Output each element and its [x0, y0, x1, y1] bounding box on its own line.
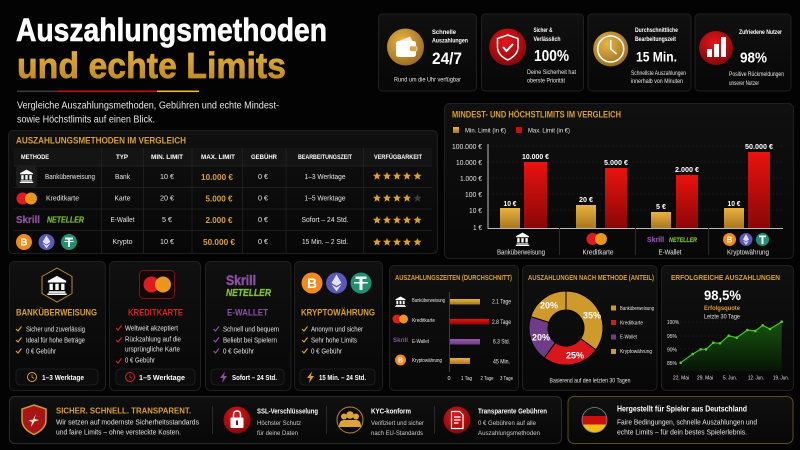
icon: clock [593, 32, 628, 66]
table row: Krypto [16, 234, 348, 250]
donut legend: Kryptowährung [620, 349, 652, 355]
donut legend: Banküberweisung [620, 306, 654, 312]
y axis: 10.000 € [456, 158, 483, 167]
bars: E-Wallet: 2.000 € [675, 165, 700, 174]
donut labels: 35% [583, 310, 601, 320]
bars: Kryptowährung [724, 142, 774, 228]
row: Banküberweisung: Banküberweisung [412, 298, 445, 304]
table row: E-Wallet: Skrill [16, 215, 40, 226]
item: fees: Auszahlungsmethoden [478, 430, 540, 437]
row: Kryptowährung: B [398, 358, 403, 364]
table row: Kreditkarte: 20 € [160, 196, 174, 202]
x axis: E-Wallet [658, 250, 682, 256]
row: Banküberweisung: 2.1 Tage [492, 298, 511, 306]
panel: KPI security: oberste Priorität [527, 78, 565, 84]
x axis: NETELLER [669, 237, 697, 244]
x axis: Kreditkarte [582, 250, 614, 256]
panel: KPI satisfaction: 98% [740, 50, 767, 66]
panel: Banküberweisung card: BANKÜBERWEISUNG [16, 308, 97, 318]
panel: KPI satisfaction: Zufriedene Nutzer [739, 30, 783, 36]
heading: table title: AUSZAHLUNGSMETHODEN IM VERGLEICH [16, 136, 186, 146]
legend: Max. Limit (in €) [528, 128, 570, 134]
pill: processing time: 15 Min. – 24 Std. [319, 373, 366, 382]
line chart: 19. Jun. [773, 376, 789, 382]
y axis: 1 € [473, 223, 483, 232]
bars: Kreditkarte: 5.000 € [604, 158, 629, 167]
donut footnote: Basierend auf den letzten 30 Tagen [550, 378, 630, 384]
table row: Banküberweisung: 10.000 € [201, 172, 233, 182]
bars: Banküberweisung: 10.000 € [522, 152, 550, 161]
panel: comparison table [8, 130, 438, 254]
icon: wallet [387, 28, 424, 66]
y axis: 100.000 € [452, 142, 483, 151]
table row: Kreditkarte: Kreditkarte [46, 196, 79, 202]
line chart: 12. Jun. [748, 376, 764, 382]
row: Banküberweisung [395, 296, 511, 307]
panel: KPI processing time: Schnellste Auszahlungen [631, 71, 686, 77]
item: KYC [337, 407, 425, 437]
item: SSL: Höchster Schutz [257, 420, 301, 427]
table row: Krypto: 50.000 € [203, 237, 235, 247]
icon: shield [489, 28, 526, 66]
panel: Kryptowährung card: 0 € Gebühr [311, 348, 343, 356]
panel: E-Wallet card: E-WALLET [227, 308, 268, 318]
table row: Banküberweisung: 0 € [258, 174, 268, 181]
panel: KPI processing time: 15 Min. [636, 48, 677, 64]
table header row: BEARBEITUNGSZEIT [298, 155, 352, 161]
table row: E-Wallet: 5 € [162, 217, 172, 224]
table header row: MAX. LIMIT [201, 154, 235, 161]
panel: KPI satisfaction: unserer Nutzer [729, 81, 759, 87]
line chart: 29. Mai [697, 376, 713, 382]
x axis labels: 1 Tag [461, 376, 472, 382]
x axis labels: 0 [447, 376, 451, 382]
icon: bank hexagon [42, 268, 72, 302]
item: fees [444, 406, 547, 437]
table row: Banküberweisung [16, 166, 346, 187]
panel: KPI processing time: Bearbeitungszeit [635, 37, 676, 43]
x axis labels: 2 Tage [480, 376, 494, 382]
x axis: Banküberweisung [497, 250, 545, 256]
panel: KPI processing time: innerhalb von Minuten [631, 79, 683, 85]
panel: Kryptowährung card: Sehr hohe Limits [311, 338, 357, 344]
bars: Kryptowährung: 10 € [728, 199, 741, 208]
donut labels: 25% [566, 350, 584, 360]
heading: success: ERFOLGREICHE AUSZAHLUNGEN [671, 273, 780, 282]
x axis: Skrill [647, 235, 664, 244]
panel: KPI fast payouts: Schnelle [432, 30, 457, 36]
panel: KPI fast payouts: 24/7 [432, 49, 462, 68]
row: E-Wallet: Skrill [393, 337, 408, 344]
heading: payout times: AUSZAHLUNGSZEITEN (DURCHSCHNITT) [395, 273, 512, 282]
panel: KPI processing time [588, 14, 691, 91]
x axis labels: 3 Tage [500, 376, 513, 382]
panel: made for Germany: Hergestellt für Spieler aus Deutschland [617, 404, 747, 414]
panel: trust banner: und faire Limits – ohne versteckte Kosten. [56, 430, 181, 436]
legend: Min. Limit (in €) [465, 128, 506, 134]
table header row [14, 148, 432, 166]
subtitle [17, 100, 279, 126]
table row: Krypto: Krypto [112, 239, 133, 246]
panel: KPI satisfaction [695, 14, 791, 91]
table row: E-Wallet: E-Wallet [110, 217, 135, 224]
panel: Banküberweisung card: 0 € Gebühr [26, 348, 57, 356]
subtitle: sowie Höchstlimits auf einen Blick. [17, 114, 155, 126]
icon: gold shield [22, 405, 46, 434]
success rate value: Letzte 30 Tage [704, 314, 741, 320]
panel: Banküberweisung card: Sicher und zuverlässig [26, 326, 85, 334]
item: SSL [224, 406, 318, 437]
panel: Banküberweisung card [10, 262, 106, 390]
donut legend: E-Wallet [620, 334, 637, 340]
row: Kreditkarte: 2.8 Tage [492, 319, 511, 326]
icon: bar graph [699, 31, 733, 65]
table row: Kreditkarte [16, 192, 346, 204]
pill: processing time: 1–5 Werktage [139, 373, 185, 382]
table row: Banküberweisung: Bank [115, 174, 130, 181]
row: Kryptowährung: Kryptowährung [412, 358, 442, 364]
panel: Kryptowährung card: KRYPTOWÄHRUNG [301, 308, 375, 318]
panel: E-Wallet card: 0 € Gebühr [223, 348, 255, 356]
line chart: 100% [667, 320, 679, 326]
panel: Kreditkarte card [110, 262, 200, 390]
bars: E-Wallet: 5 € [656, 202, 667, 211]
panel: payout times chart [390, 266, 518, 390]
table row: Kreditkarte: 1–5 Werktage [304, 196, 346, 202]
row: Kreditkarte [392, 314, 511, 326]
panel: KPI security: Deine Sicherheit hat [527, 70, 576, 76]
y axis: 1.000 € [460, 174, 483, 183]
icon: wallet logos [226, 272, 272, 299]
y axis: 10 € [469, 206, 483, 215]
panel: KPI fast payouts [378, 14, 476, 91]
row: Kreditkarte: Kreditkarte [412, 318, 435, 324]
panel: Kryptowährung card [294, 262, 382, 390]
table row: E-Wallet [16, 215, 349, 226]
table row: Krypto: 0 € [258, 239, 268, 246]
row: Kryptowährung [395, 354, 510, 366]
x axis: Kryptowährung [727, 250, 769, 256]
pill: processing time: 1–3 Werktage [42, 373, 84, 382]
panel: KPI fast payouts: Auszahlungen [432, 38, 468, 44]
panel: Banküberweisung card: Ideal für hohe Beträge [26, 338, 85, 344]
icon: german flag [582, 407, 607, 434]
item: KYC: nach EU-Standards [371, 430, 424, 437]
panel: E-Wallet card: Beliebt bei Spielern [223, 338, 277, 344]
table header row: METHODE [21, 155, 49, 161]
panel: Kreditkarte card: ursprüngliche Karte [125, 346, 180, 354]
bars: Kreditkarte: 20 € [579, 195, 594, 204]
table header row: GEBÜHR [251, 152, 277, 161]
table row: E-Wallet: NETELLER [47, 216, 84, 224]
heading: chart title: MINDEST- UND HÖCHSTLIMITS IM VERGLEICH [452, 110, 621, 120]
table row: Kreditkarte: Karte [114, 196, 131, 202]
panel: trust banner [10, 396, 562, 444]
table row: Kreditkarte: 5.000 € [206, 194, 233, 204]
star ratings [373, 172, 422, 246]
title: Auszahlungsmethoden [16, 12, 327, 48]
item: KYC: Verifiziert und sicher [371, 420, 425, 427]
pill: processing time: Sofort – 24 Std. [232, 373, 277, 382]
bars: Banküberweisung [500, 152, 550, 228]
table row: E-Wallet: 0 € [258, 217, 268, 224]
panel: KPI security: Verlässlich [534, 37, 561, 43]
table header row: MIN. LIMIT [151, 154, 183, 161]
line chart [667, 320, 789, 382]
panel: Kreditkarte card: Weltweit akzeptiert [125, 326, 178, 332]
table row: E-Wallet: 2.000 € [206, 215, 233, 225]
success rate value: Erfolgsquote [704, 305, 740, 312]
heading: share: AUSZAHLUNGEN NACH METHODE (ANTEIL) [528, 273, 654, 282]
bars: Kreditkarte [576, 158, 629, 228]
panel: KPI satisfaction: Positive Rückmeldungen [729, 72, 784, 78]
panel: Kreditkarte card: 0 € Gebühr [125, 358, 156, 364]
table header row: TYP [116, 154, 129, 161]
table row: Krypto: 10 € [160, 239, 174, 246]
success rate value [704, 287, 742, 320]
item: fees: 0 € Gebühren auf alle [478, 420, 536, 427]
table row: Banküberweisung: 10 € [160, 174, 174, 181]
table row: Krypto: 15 Min. – 2 Std. [302, 239, 348, 246]
row: E-Wallet: E-Wallet [412, 339, 429, 345]
table row: Kreditkarte: 0 € [258, 196, 268, 202]
success rate value: 98,5% [704, 287, 742, 303]
panel: Kreditkarte card: Rückzahlung auf die [125, 336, 181, 344]
panel: E-Wallet card [206, 262, 291, 390]
donut labels: 20% [540, 300, 558, 310]
panel: trust banner: SICHER. SCHNELL. TRANSPARENT. [56, 406, 191, 416]
german colour underline [17, 90, 199, 92]
line chart: 95% [667, 334, 677, 340]
y axis: 100 € [465, 190, 483, 199]
donut legend: Kreditkarte [620, 320, 643, 326]
item: SSL: SSL-Verschlüsselung [257, 408, 318, 416]
panel: trust banner: Wir setzen auf modernste Sicherheitsstandards [56, 420, 199, 426]
panel: Kryptowährung card: Anonym und sicher [311, 326, 364, 334]
bars: Banküberweisung: 10 € [504, 199, 517, 208]
panel: limits bar chart [444, 104, 794, 258]
title [16, 12, 327, 86]
panel: made for Germany: Faire Bedingungen, schnelle Auszahlungen und [617, 420, 757, 426]
line chart: 5. Jun. [723, 376, 737, 382]
panel: KPI processing time: Durchschnittliche [635, 28, 679, 34]
bars: E-Wallet [651, 165, 700, 228]
donut labels: 20% [532, 332, 550, 342]
y axis [452, 142, 783, 232]
line chart: 22. Mai [673, 376, 689, 382]
donut chart [529, 291, 603, 365]
donut legend [611, 306, 654, 355]
donut labels [532, 300, 601, 360]
icon: card logo [140, 270, 174, 298]
panel: made for Germany: echte Limits – für dein bestes Spielerlebnis. [617, 430, 747, 436]
item: KYC: KYC-konform [371, 408, 411, 416]
panel: KPI security: Sicher & [534, 28, 553, 34]
panel: share donut chart [522, 266, 657, 390]
legend [453, 127, 570, 134]
row: E-Wallet [393, 337, 510, 346]
panel: KPI security: 100% [534, 48, 569, 65]
x axis [488, 228, 783, 256]
item: SSL: für deine Daten [257, 430, 298, 437]
panel: made for Germany [568, 396, 793, 444]
panel: KPI security [482, 14, 584, 91]
panel: E-Wallet card: Schnell und bequem [223, 326, 279, 334]
row: Kryptowährung: 45 Min. [493, 358, 510, 366]
table header row: VERFÜGBARKEIT [374, 154, 422, 161]
bars: Kryptowährung: 50.000 € [745, 142, 774, 151]
table row: Banküberweisung: 1–3 Werktage [304, 174, 346, 181]
subtitle: Vergleiche Auszahlungsmethoden, Gebühren und echte Mindest- [17, 100, 279, 112]
icon: wallet logos: Skrill [226, 272, 256, 288]
title: und echte Limits [17, 45, 286, 86]
table row: Banküberweisung: Banküberweisung [45, 174, 95, 181]
icon: wallet logos: NETELLER [226, 288, 272, 299]
panel: success rate [662, 266, 794, 390]
panel: Kreditkarte card: KREDITKARTE [128, 308, 183, 318]
panel: KPI fast payouts: Rund um die Uhr verfügbar [394, 78, 461, 84]
item: fees: Transparente Gebühren [478, 408, 547, 416]
table row: E-Wallet: Sofort – 24 Std. [302, 217, 349, 224]
table row: Krypto: B [20, 238, 28, 248]
line chart: 90% [667, 348, 677, 354]
icon: crypto coins: B [307, 275, 317, 291]
x axis: B [727, 236, 733, 244]
x axis labels [447, 376, 513, 382]
row: E-Wallet: 6.3 Std. [493, 338, 510, 346]
line chart: 85% [667, 361, 677, 367]
